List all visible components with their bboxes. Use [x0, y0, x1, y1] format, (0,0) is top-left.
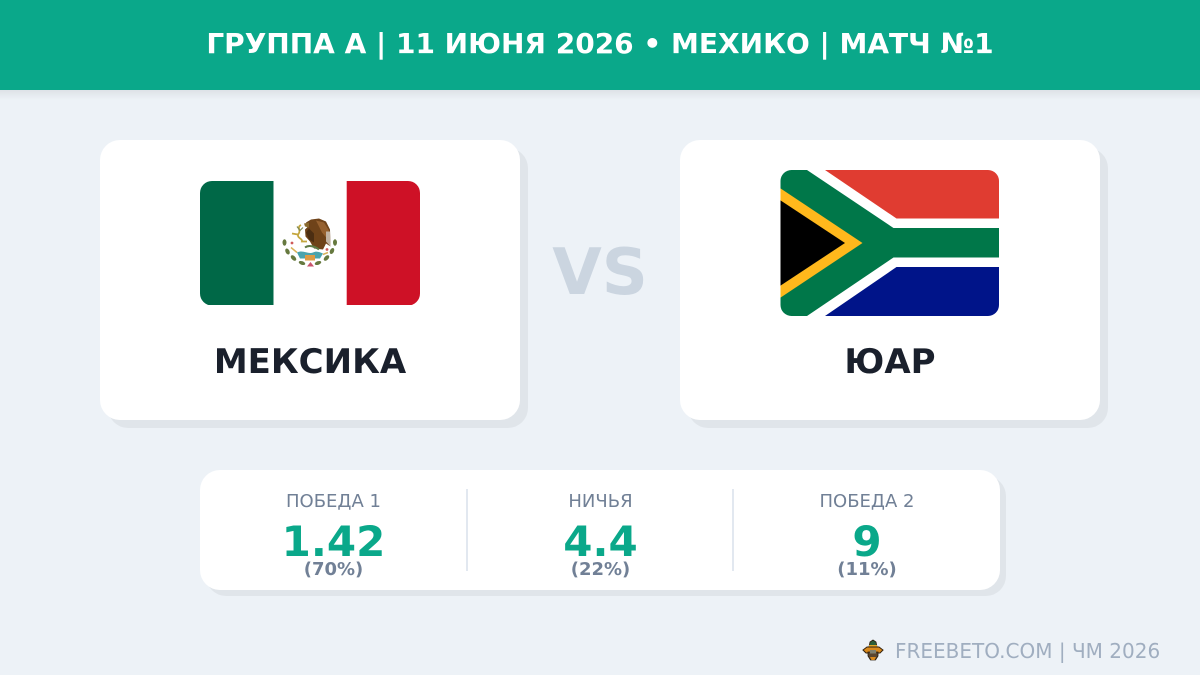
odds column: draw — [563, 490, 638, 580]
probability: (22%) — [571, 558, 630, 580]
wreath — [282, 239, 337, 265]
probability: (70%) — [304, 558, 363, 580]
ribbon berries — [291, 241, 293, 244]
snake — [292, 224, 307, 241]
icon: flag of Mexico — [200, 181, 420, 305]
odds column: home win — [282, 490, 385, 580]
panel: team Mexico — [100, 140, 520, 420]
icon: sombrero logo — [862, 640, 884, 660]
label: НИЧЬЯ — [568, 490, 633, 512]
team name: Mexico: МЕКСИКА — [214, 342, 406, 382]
icon: flag of South Africa — [780, 170, 999, 316]
header title: ГРУППА А | 11 ИЮНЯ 2026 • МЕХИКО | МАТЧ №1 — [206, 27, 994, 60]
nopal cactus — [305, 246, 319, 249]
footer brand — [862, 639, 1160, 663]
odds value: 9 — [852, 516, 882, 566]
label: ПОБЕДА 1 — [286, 490, 381, 512]
eagle — [305, 218, 330, 249]
label: ПОБЕДА 2 — [820, 490, 914, 512]
pedestal — [305, 254, 315, 260]
probability: (11%) — [837, 558, 897, 580]
panel: team South Africa — [680, 140, 1100, 420]
team name: South Africa: ЮАР — [844, 342, 936, 382]
header banner — [0, 0, 1200, 90]
water — [297, 251, 323, 258]
footer text: FREEBETO.COM | ЧМ 2026 — [895, 639, 1160, 663]
odds column: away win — [820, 490, 914, 580]
odds value: 1.42 — [282, 516, 385, 566]
odds value: 4.4 — [563, 516, 638, 566]
VS label: VS — [552, 236, 648, 310]
panel: betting odds — [200, 470, 1000, 590]
